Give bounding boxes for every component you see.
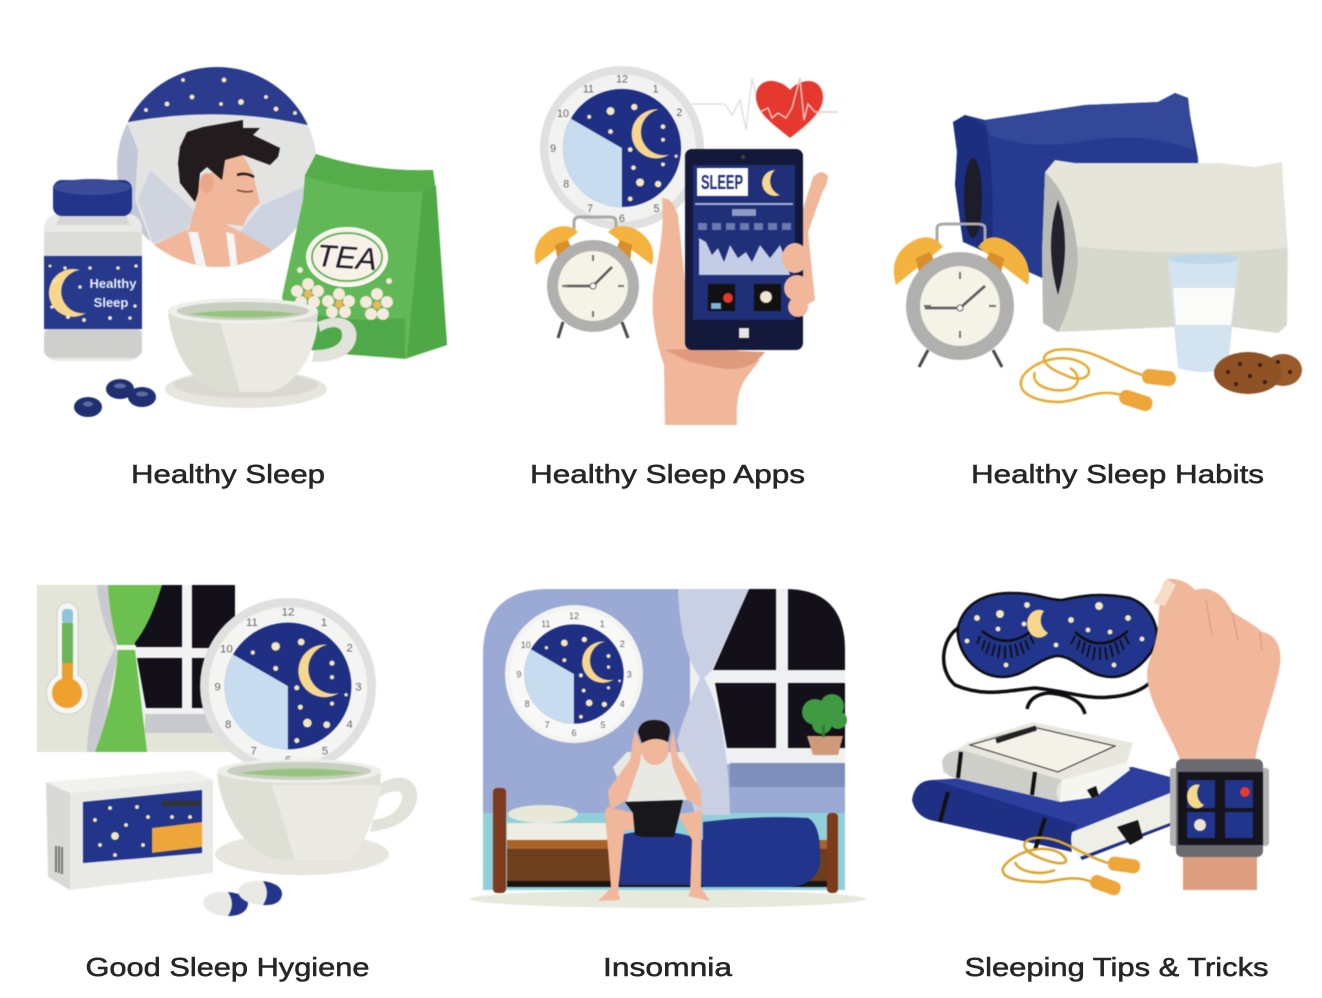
sleep clock: 2 [620,639,625,649]
sleep clock: 11 [246,617,258,629]
alarm clock [535,217,653,338]
blueberries [74,379,156,417]
label: Sleeping Tips & Tricks: Sleeping Tips & Tricks [964,952,1268,982]
window with curtain [37,585,235,752]
sleeping man portrait circle [117,67,320,270]
heart rate icon [692,78,838,138]
sleep clock: 4 [346,719,353,731]
panel: Healthy Sleep Apps [535,66,838,425]
capsules [202,879,283,918]
phone: SLEEP [701,172,743,194]
panel: Good Sleep Hygiene [37,585,417,918]
floor shadow [470,890,866,908]
sleep clock: 5 [322,746,328,758]
sleep clock: 6 [285,754,291,766]
sleep clock: 12 [616,73,628,85]
sleep clock: 5 [653,203,659,215]
sleep clock: 4 [620,699,625,709]
sleep clock: 10 [220,644,233,656]
sleep clock: 1 [321,617,327,629]
label: Healthy Sleep: Healthy Sleep [131,459,325,489]
hair [178,120,280,202]
sleep clock: 6 [572,728,576,738]
sleep clock: 10 [557,108,569,120]
sleep clock: 12 [569,611,579,621]
sleep clock [200,598,376,774]
cookies [1214,352,1302,394]
sleep clock: 9 [516,669,521,679]
sleep clock [540,66,704,230]
alarm clock [894,224,1029,367]
label: Good Sleep Hygiene: Good Sleep Hygiene [86,952,370,982]
panel: Sleeping Tips & Tricks [912,579,1280,897]
supplement bottle: Sleep [94,295,128,310]
label: Healthy Sleep Habits: Healthy Sleep Habits [971,459,1264,489]
label: Healthy Sleep Apps: Healthy Sleep Apps [530,459,805,489]
sleep clock: 6 [619,213,625,225]
sleep clock: 8 [563,178,569,190]
sleep mask with strap [944,593,1163,714]
sleep clock: 7 [545,720,550,730]
sleep clock: 9 [550,143,556,155]
sleep clock: 1 [600,619,605,629]
panel: Insomnia [470,589,866,908]
curtain [677,589,749,815]
earplugs with cord [1021,349,1177,413]
sleep clock: 3 [355,681,362,693]
hand holding phone [653,172,828,425]
torso [154,224,272,268]
tea bag [282,154,447,359]
sleep clock: 3 [627,669,632,679]
sleep clock: 11 [541,619,550,629]
earplugs with cord [1003,838,1141,897]
saucer and teacup [165,298,357,408]
man with head in hands [598,720,710,901]
sleep clock: 10 [521,640,531,650]
neck and face [188,155,260,232]
sleep clock: 5 [600,720,605,730]
fingers over phone [782,243,810,317]
raised fist and wrist [1147,579,1280,890]
smartwatch [1170,759,1269,857]
sleep clock: 8 [225,719,231,731]
tea bag: TEA [316,238,378,277]
bedroom wall and window [483,589,845,890]
thermometer [47,602,88,714]
sleep clock: 1 [653,83,659,95]
potted plant [802,694,847,755]
label: Insomnia: Insomnia [603,952,733,982]
bed [493,788,838,893]
sleep clock: 9 [214,681,221,693]
supplement bottle: Healthy [90,276,137,291]
sleep clock: 2 [676,107,682,119]
panel: Healthy Sleep [44,67,447,417]
sleep clock: 7 [587,203,593,215]
sleep clock: 8 [525,699,530,709]
glass of milk [1168,254,1239,372]
white pillow [1042,160,1288,333]
navy pillow [953,93,1200,278]
sleep clock: 11 [583,83,594,95]
panel: Healthy Sleep Habits [894,93,1302,413]
sleep clock [505,605,643,743]
saucer and teacup [215,759,417,875]
stacked books [912,722,1170,860]
sleep clock: 12 [282,607,294,619]
sleep clock: 7 [250,746,257,758]
supplement box [46,770,213,890]
sleep clock: 2 [346,643,353,655]
supplement bottle [44,179,142,361]
phone [685,149,803,350]
